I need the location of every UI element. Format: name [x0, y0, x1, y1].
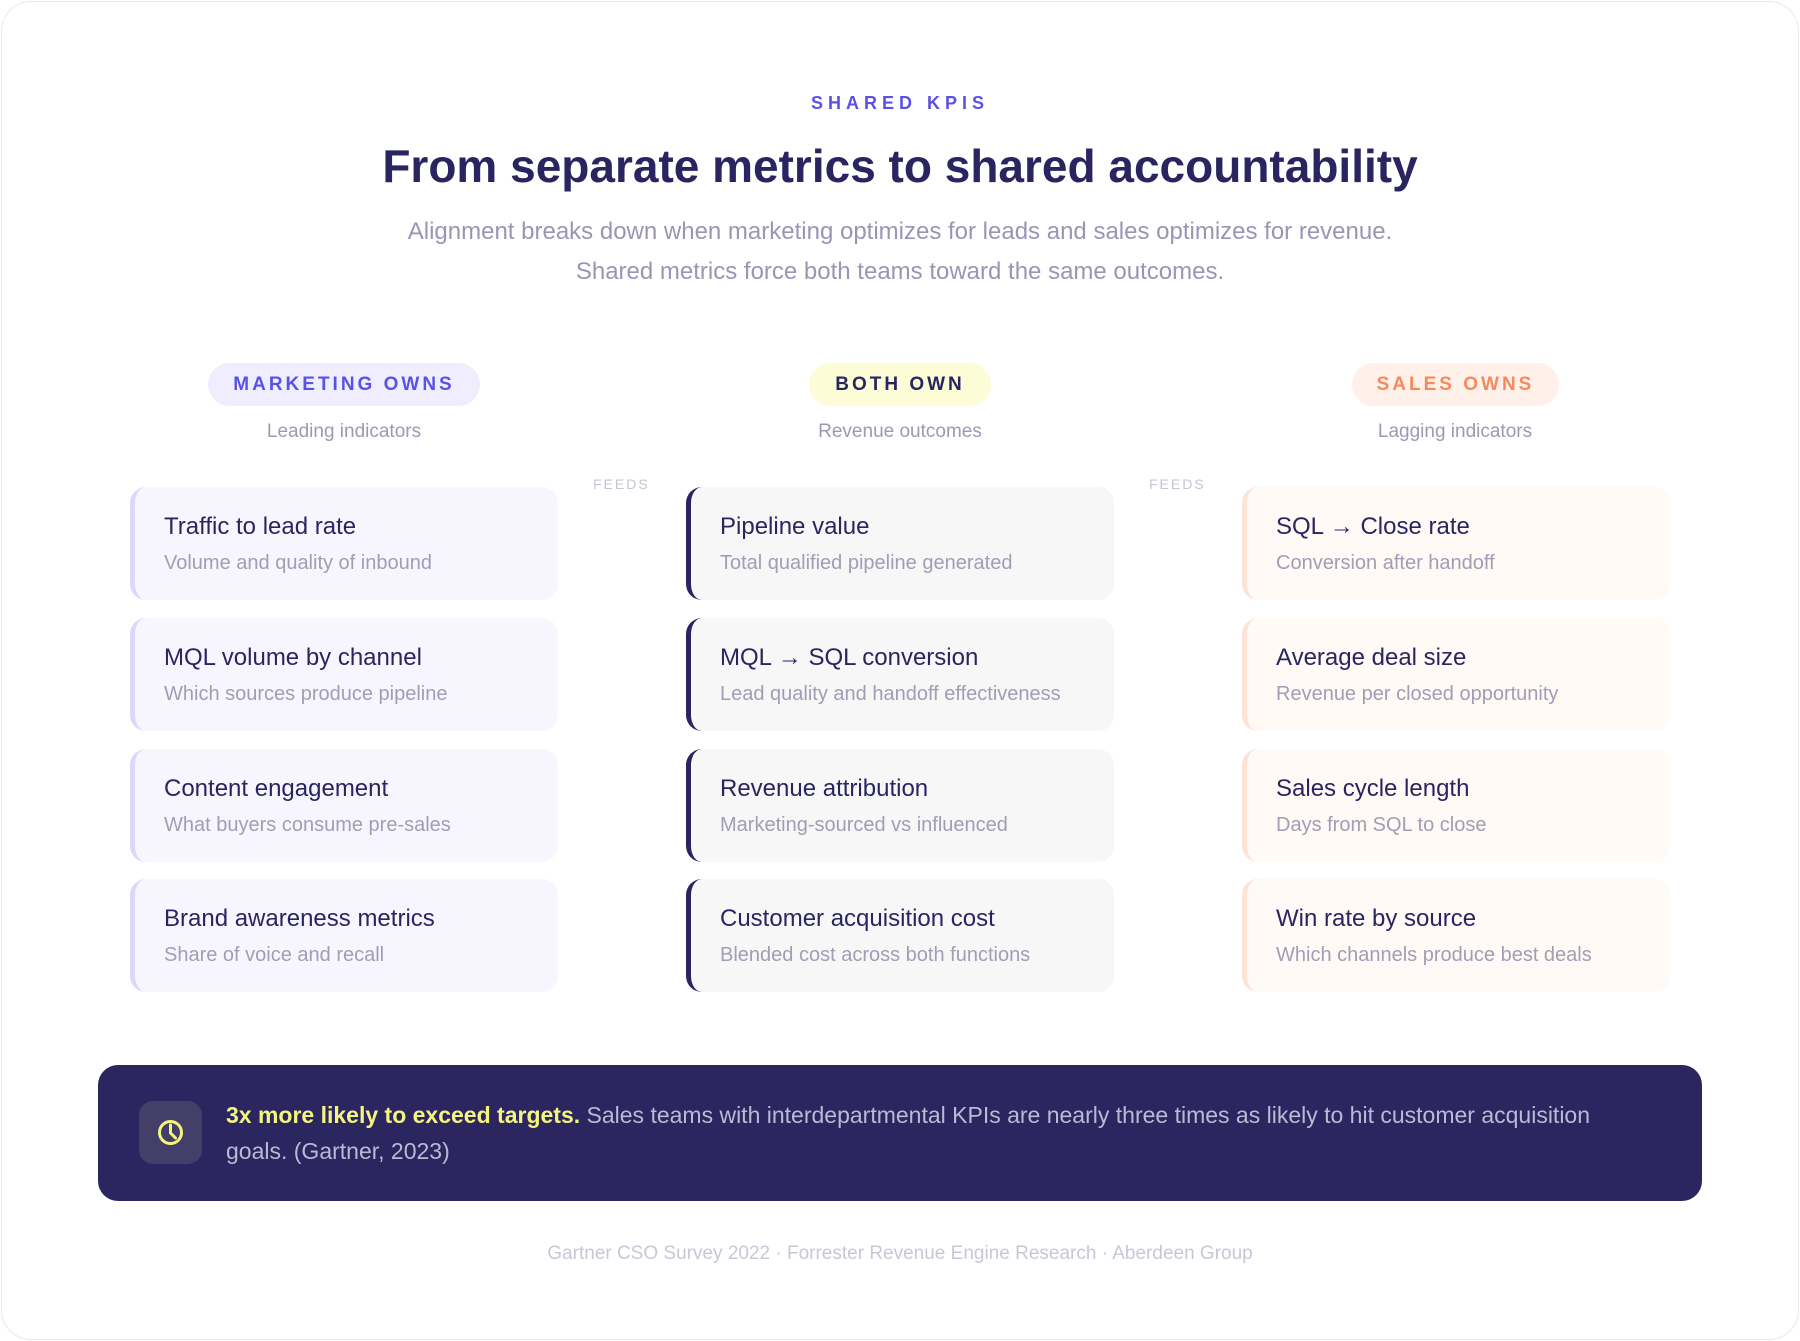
- text: leading indicators: Leading indicators: [267, 421, 421, 442]
- card: win rate: [1242, 879, 1670, 992]
- pill: sales owns: [1352, 363, 1559, 406]
- card: deal size: Revenue per closed opportunity: [1276, 683, 1558, 705]
- column: both: [686, 487, 1061, 992]
- icon: clock: [139, 1101, 202, 1164]
- card: close rate: SQL → Close rate: [1276, 513, 1470, 540]
- card: brand: Brand awareness metrics: [164, 905, 435, 932]
- pill: both own: BOTH OWN: [835, 374, 965, 394]
- card: attribution: [686, 749, 1114, 862]
- card: pipeline: Pipeline value: [720, 513, 869, 540]
- subtitle: Shared metrics force both teams toward the same outcomes.: [576, 258, 1224, 285]
- card: mql volume: [130, 618, 558, 731]
- card: cycle: Days from SQL to close: [1276, 814, 1486, 836]
- card: cycle: [1242, 749, 1670, 862]
- card: cac: Blended cost across both functions: [720, 944, 1030, 966]
- card: traffic: Traffic to lead rate: [164, 513, 356, 540]
- card: cycle: Sales cycle length: [1276, 775, 1469, 802]
- card: win rate: Win rate by source: [1276, 905, 1476, 932]
- pill: both own: [809, 363, 991, 406]
- card: attribution: Marketing-sourced vs influenced: [720, 814, 1008, 836]
- eyebrow: SHARED KPIS: [811, 93, 989, 113]
- card: traffic: Volume and quality of inbound: [164, 552, 432, 574]
- card: content: [130, 749, 558, 862]
- text: lagging indicators: Lagging indicators: [1378, 421, 1532, 442]
- column: marketing: [130, 487, 558, 992]
- card: win rate: Which channels produce best deals: [1276, 944, 1592, 966]
- card: deal size: [1242, 618, 1670, 731]
- title: From separate metrics to shared accountability: [382, 140, 1418, 192]
- column: sales: [1242, 487, 1670, 992]
- card: mql sql: [686, 618, 1114, 731]
- text: revenue outcomes: Revenue outcomes: [818, 421, 982, 442]
- pill: sales owns: SALES OWNS: [1377, 374, 1534, 394]
- card: pipeline: Total qualified pipeline generated: [720, 552, 1012, 574]
- card: cac: Customer acquisition cost: [720, 905, 995, 932]
- callout banner: [98, 1065, 1702, 1201]
- card: pipeline: [686, 487, 1114, 600]
- pill: marketing owns: MARKETING OWNS: [233, 374, 455, 394]
- card: brand: Share of voice and recall: [164, 944, 384, 966]
- card: deal size: Average deal size: [1276, 644, 1466, 671]
- card: mql sql: Lead quality and handoff effectiveness: [720, 683, 1061, 705]
- card: brand: [130, 879, 558, 992]
- card: attribution: Revenue attribution: [720, 775, 928, 802]
- pill: marketing owns: [208, 363, 480, 406]
- subtitle: [408, 218, 1392, 285]
- card: mql sql: MQL → SQL conversion: [720, 644, 978, 671]
- card: content: What buyers consume pre-sales: [164, 814, 451, 836]
- callout text: 3x more likely to exceed targets. Sales teams with interdepartmental KPIs are nearly three times as likely to hit customer acquisition goals. (Gartner, 2023): [226, 1102, 1590, 1164]
- label: feeds 1: FEEDS: [593, 476, 650, 492]
- card: mql volume: Which sources produce pipeline: [164, 683, 448, 705]
- subtitle: Alignment breaks down when marketing optimizes for leads and sales optimizes for revenue.: [408, 218, 1392, 245]
- card: mql volume: MQL volume by channel: [164, 644, 422, 671]
- card: content: Content engagement: [164, 775, 388, 802]
- label: feeds 2: FEEDS: [1149, 476, 1206, 492]
- card: close rate: Conversion after handoff: [1276, 552, 1495, 574]
- card: cac: [686, 879, 1114, 992]
- footer sources: Gartner CSO Survey 2022 · Forrester Revenue Engine Research · Aberdeen Group: [547, 1243, 1253, 1264]
- card: close rate: [1242, 487, 1670, 600]
- card: traffic: [130, 487, 558, 600]
